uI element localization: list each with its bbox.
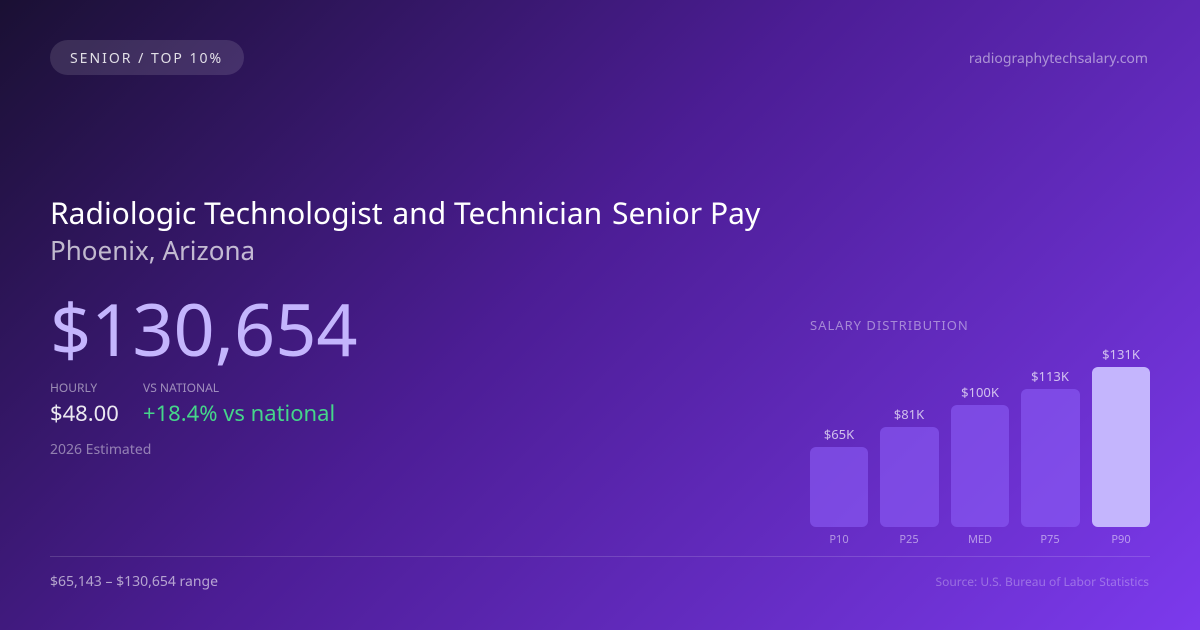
bar: MED <box>951 383 1009 547</box>
badge: senior / top 10%: SENIOR / TOP 10% <box>70 49 223 68</box>
main salary figure: $130,654 <box>50 280 358 378</box>
salary range footer: $65,143 – $130,654 range <box>50 572 218 591</box>
bar: P25: $81K <box>894 405 924 423</box>
source footer: Source: U.S. Bureau of Labor Statistics <box>936 573 1149 590</box>
bar: P10: $65K <box>824 425 854 443</box>
bar: P10 <box>810 425 868 547</box>
bar: P25 <box>880 405 939 547</box>
hourly label: HOURLY <box>50 379 97 396</box>
bar: P90: $131K <box>1102 345 1140 363</box>
subtitle: location: Phoenix, Arizona <box>50 232 255 268</box>
bar: P10: P10 <box>829 532 849 547</box>
bar: P75: P75 <box>1040 532 1060 547</box>
site domain: radiographytechsalary.com <box>969 49 1148 68</box>
bar: P75: $113K <box>1031 367 1069 385</box>
stat: vs national <box>143 379 335 428</box>
stat: hourly <box>50 379 119 428</box>
bar chart: salary distribution <box>810 345 1150 547</box>
bar: P75 <box>1021 367 1080 547</box>
badge: senior / top 10% <box>50 40 244 75</box>
title: Radiologic Technologist and Technician Senior Pay <box>50 192 760 233</box>
estimate note: 2026 Estimated <box>50 440 151 459</box>
chart heading: SALARY DISTRIBUTION <box>810 316 969 334</box>
bar: P25: P25 <box>899 532 919 547</box>
vs national label: VS NATIONAL <box>143 379 219 396</box>
vs national value: +18.4% vs national <box>143 398 335 428</box>
bar: MED: $100K <box>961 383 999 401</box>
bar: P90 <box>1092 345 1150 547</box>
hourly value: $48.00 <box>50 398 119 428</box>
bar: MED: MED <box>968 532 992 547</box>
bar: P90: P90 <box>1111 532 1131 547</box>
